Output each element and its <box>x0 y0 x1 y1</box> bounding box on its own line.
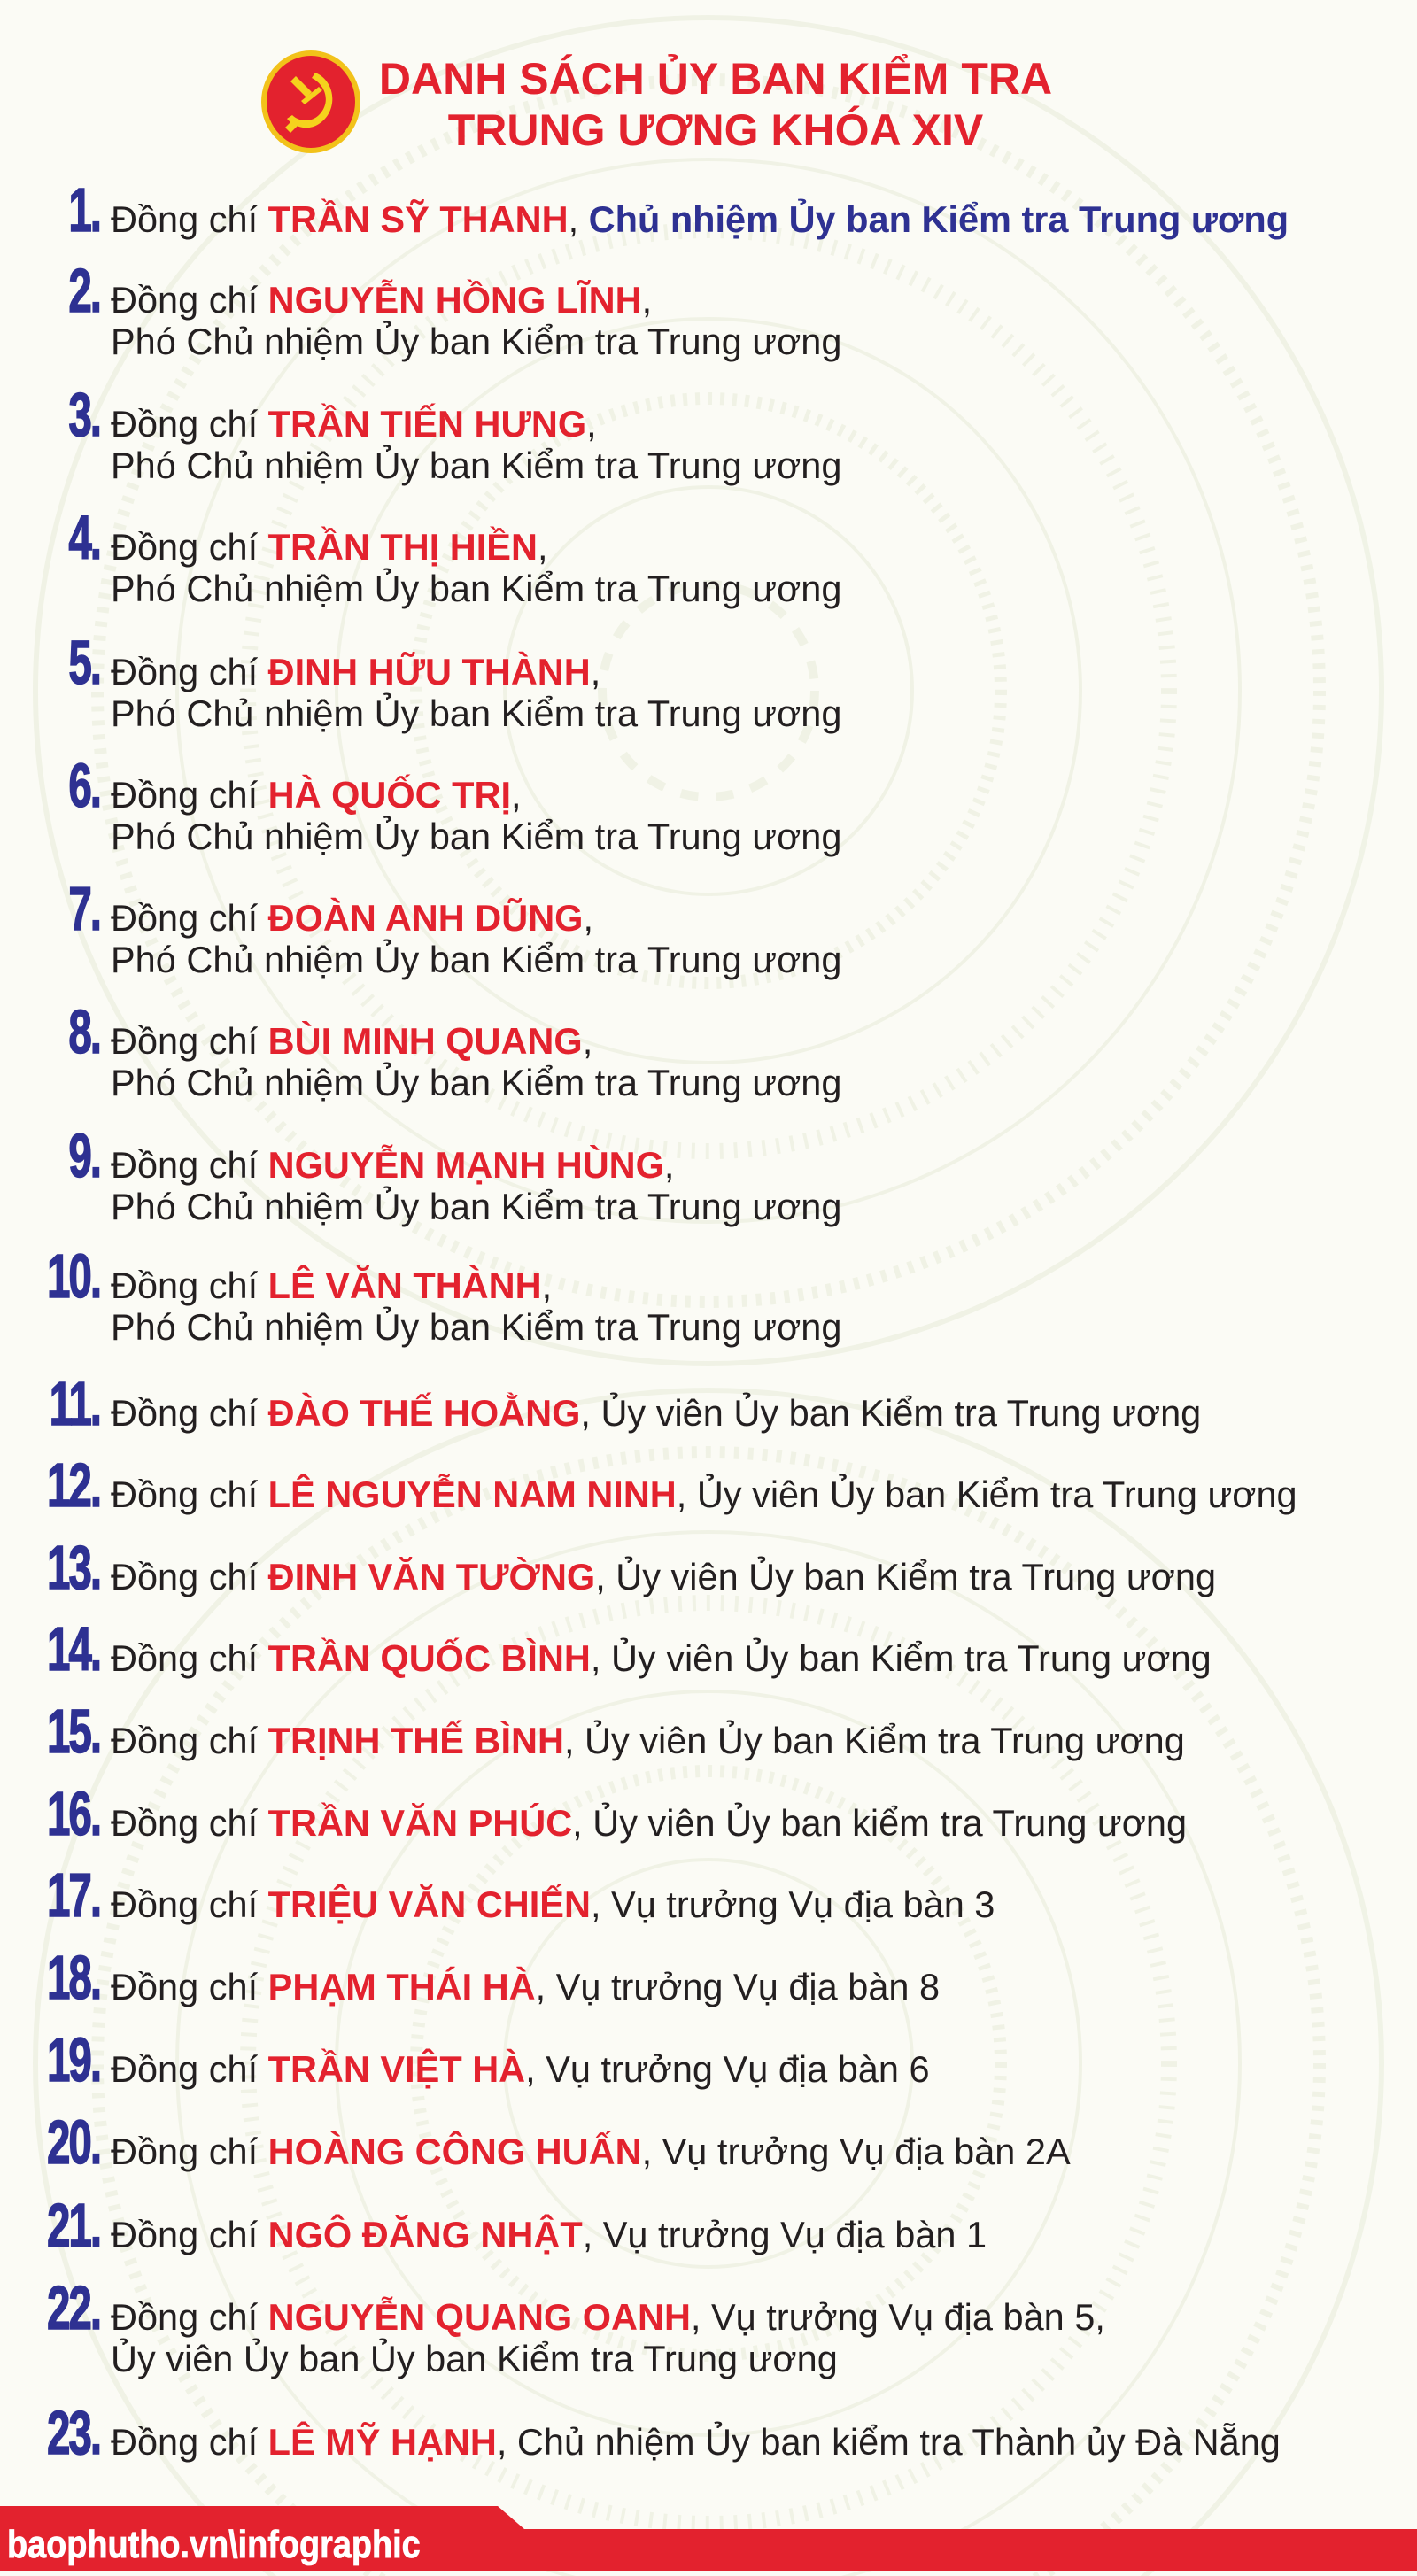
item 21 <box>47 2191 987 2260</box>
item 11: 11. <box>50 1369 100 1438</box>
item 13: Đồng chí ĐINH VĂN TƯỜNG, Ủy viên Ủy ban Kiểm tra Trung ương <box>111 1556 1216 1597</box>
title: DANH SÁCH ỦY BAN KIỂM TRA <box>379 54 1052 104</box>
item 6: 6. <box>68 751 100 820</box>
item 22 <box>47 2273 1105 2379</box>
item 7: Đồng chí ĐOÀN ANH DŨNG, <box>111 897 593 939</box>
item 1 <box>68 175 1289 244</box>
item 2: Phó Chủ nhiệm Ủy ban Kiểm tra Trung ương <box>111 321 841 362</box>
item 18: Đồng chí PHẠM THÁI HÀ, Vụ trưởng Vụ địa bàn 8 <box>111 1966 940 2007</box>
item 16: 16. <box>47 1779 100 1848</box>
item 9: 9. <box>68 1121 100 1190</box>
item 4: Phó Chủ nhiệm Ủy ban Kiểm tra Trung ương <box>111 568 841 609</box>
item 12: 12. <box>47 1450 100 1520</box>
item 14: Đồng chí TRẦN QUỐC BÌNH, Ủy viên Ủy ban Kiểm tra Trung ương <box>111 1637 1212 1679</box>
item 10: 10. <box>47 1242 100 1311</box>
item 5: Đồng chí ĐINH HỮU THÀNH, <box>111 651 600 692</box>
item 5: Phó Chủ nhiệm Ủy ban Kiểm tra Trung ương <box>111 692 841 734</box>
item 13 <box>47 1533 1216 1602</box>
item 3: Đồng chí TRẦN TIẾN HƯNG, <box>111 403 597 445</box>
item 1: 1. <box>68 175 100 244</box>
item 5: 5. <box>68 628 100 697</box>
item 10: Phó Chủ nhiệm Ủy ban Kiểm tra Trung ương <box>111 1306 841 1348</box>
title: TRUNG ƯƠNG KHÓA XIV <box>448 105 983 155</box>
item 17: Đồng chí TRIỆU VĂN CHIẾN, Vụ trưởng Vụ địa bàn 3 <box>111 1884 995 1925</box>
title <box>379 54 1052 155</box>
item 14: 14. <box>47 1614 100 1683</box>
item 23 <box>47 2398 1281 2467</box>
item 4: Đồng chí TRẦN THỊ HIỀN, <box>111 526 547 568</box>
item 21: Đồng chí NGÔ ĐĂNG NHẬT, Vụ trưởng Vụ địa bàn 1 <box>111 2214 987 2255</box>
item 23: 23. <box>47 2398 100 2467</box>
item 19: Đồng chí TRẦN VIỆT HÀ, Vụ trưởng Vụ địa bàn 6 <box>111 2048 930 2090</box>
item 13: 13. <box>47 1533 100 1602</box>
item 4: 4. <box>68 503 100 572</box>
item 3: 3. <box>68 380 100 449</box>
item 10 <box>47 1242 841 1348</box>
item 19 <box>47 2025 930 2094</box>
item 5 <box>68 628 841 734</box>
item 6: Phó Chủ nhiệm Ủy ban Kiểm tra Trung ương <box>111 816 841 857</box>
item 2: Đồng chí NGUYỄN HỒNG LĨNH, <box>111 279 652 321</box>
item 22: Ủy viên Ủy ban Ủy ban Kiểm tra Trung ương <box>111 2338 838 2379</box>
item 6: Đồng chí HÀ QUỐC TRỊ, <box>111 774 522 816</box>
item 20 <box>47 2108 1071 2177</box>
footer text: baophutho.vn\infographic <box>7 2523 421 2566</box>
item 12 <box>47 1450 1297 1520</box>
item 4 <box>68 503 841 609</box>
item 7: Phó Chủ nhiệm Ủy ban Kiểm tra Trung ương <box>111 939 841 980</box>
item 8 <box>68 997 841 1103</box>
item 22: 22. <box>47 2273 100 2342</box>
item 11: Đồng chí ĐÀO THẾ HOẰNG, Ủy viên Ủy ban Kiểm tra Trung ương <box>111 1392 1201 1434</box>
item 21: 21. <box>47 2191 100 2260</box>
item 8: Phó Chủ nhiệm Ủy ban Kiểm tra Trung ương <box>111 1062 841 1103</box>
item 6 <box>68 751 841 857</box>
item 14 <box>47 1614 1212 1683</box>
item 3 <box>68 380 841 486</box>
item 17: 17. <box>47 1860 100 1930</box>
item 20: Đồng chí HOÀNG CÔNG HUẤN, Vụ trưởng Vụ địa bàn 2A <box>111 2131 1071 2172</box>
item 18: 18. <box>47 1943 100 2012</box>
item 15: 15. <box>47 1697 100 1766</box>
item 17 <box>47 1860 995 1930</box>
item 20: 20. <box>47 2108 100 2177</box>
item 2 <box>68 256 841 362</box>
item 8: Đồng chí BÙI MINH QUANG, <box>111 1020 592 1062</box>
item 9: Đồng chí NGUYỄN MẠNH HÙNG, <box>111 1144 674 1186</box>
item 22: Đồng chí NGUYỄN QUANG OANH, Vụ trưởng Vụ địa bàn 5, <box>111 2296 1105 2338</box>
item 8: 8. <box>68 997 100 1066</box>
item 11 <box>50 1369 1201 1438</box>
item 2: 2. <box>68 256 100 325</box>
item 23: Đồng chí LÊ MỸ HẠNH, Chủ nhiệm Ủy ban kiểm tra Thành ủy Đà Nẵng <box>111 2421 1281 2463</box>
item 19: 19. <box>47 2025 100 2094</box>
item 15 <box>47 1697 1185 1766</box>
footer bar <box>0 2506 1417 2571</box>
item 12: Đồng chí LÊ NGUYỄN NAM NINH, Ủy viên Ủy ban Kiểm tra Trung ương <box>111 1474 1297 1515</box>
item 7: 7. <box>68 874 100 943</box>
icon: party emblem <box>261 50 360 153</box>
item 18 <box>47 1943 940 2012</box>
item 15: Đồng chí TRỊNH THẾ BÌNH, Ủy viên Ủy ban Kiểm tra Trung ương <box>111 1720 1185 1761</box>
item 7 <box>68 874 841 980</box>
item 3: Phó Chủ nhiệm Ủy ban Kiểm tra Trung ương <box>111 445 841 486</box>
item 9: Phó Chủ nhiệm Ủy ban Kiểm tra Trung ương <box>111 1186 841 1227</box>
item 10: Đồng chí LÊ VĂN THÀNH, <box>111 1265 552 1306</box>
item 9 <box>68 1121 841 1227</box>
item 16: Đồng chí TRẦN VĂN PHÚC, Ủy viên Ủy ban kiểm tra Trung ương <box>111 1802 1187 1844</box>
item 1: Đồng chí TRẦN SỸ THANH, Chủ nhiệm Ủy ban Kiểm tra Trung ương <box>111 198 1289 240</box>
item 16 <box>47 1779 1187 1848</box>
